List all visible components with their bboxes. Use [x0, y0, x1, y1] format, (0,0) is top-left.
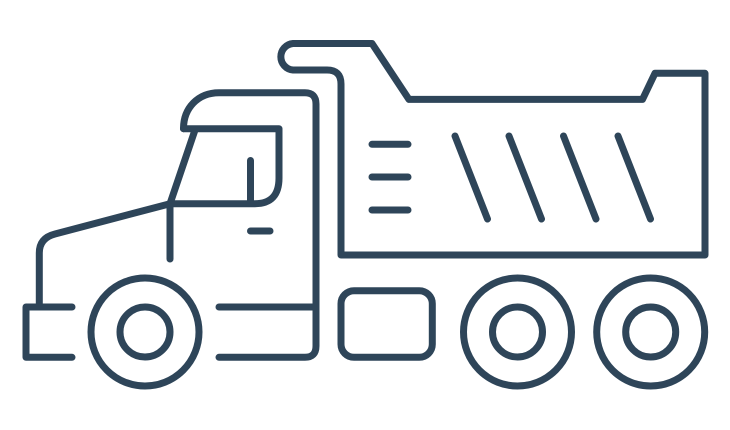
window: [170, 129, 279, 204]
cab sill line: [219, 304, 316, 310]
door front edge: [166, 204, 174, 259]
front wheel: [91, 278, 199, 386]
bed diagonal ribs: [455, 136, 650, 219]
hood: [39, 204, 170, 307]
fuel tank: [341, 291, 432, 357]
bed vent lines: [372, 144, 408, 210]
rear wheel: [597, 278, 705, 386]
middle wheel: [464, 278, 572, 386]
window divider: [247, 160, 254, 203]
cab roof, rear wall and lower edge: [184, 93, 316, 357]
front bumper: [26, 307, 72, 357]
dump bed outline: [281, 44, 705, 255]
door handle: [250, 228, 270, 234]
